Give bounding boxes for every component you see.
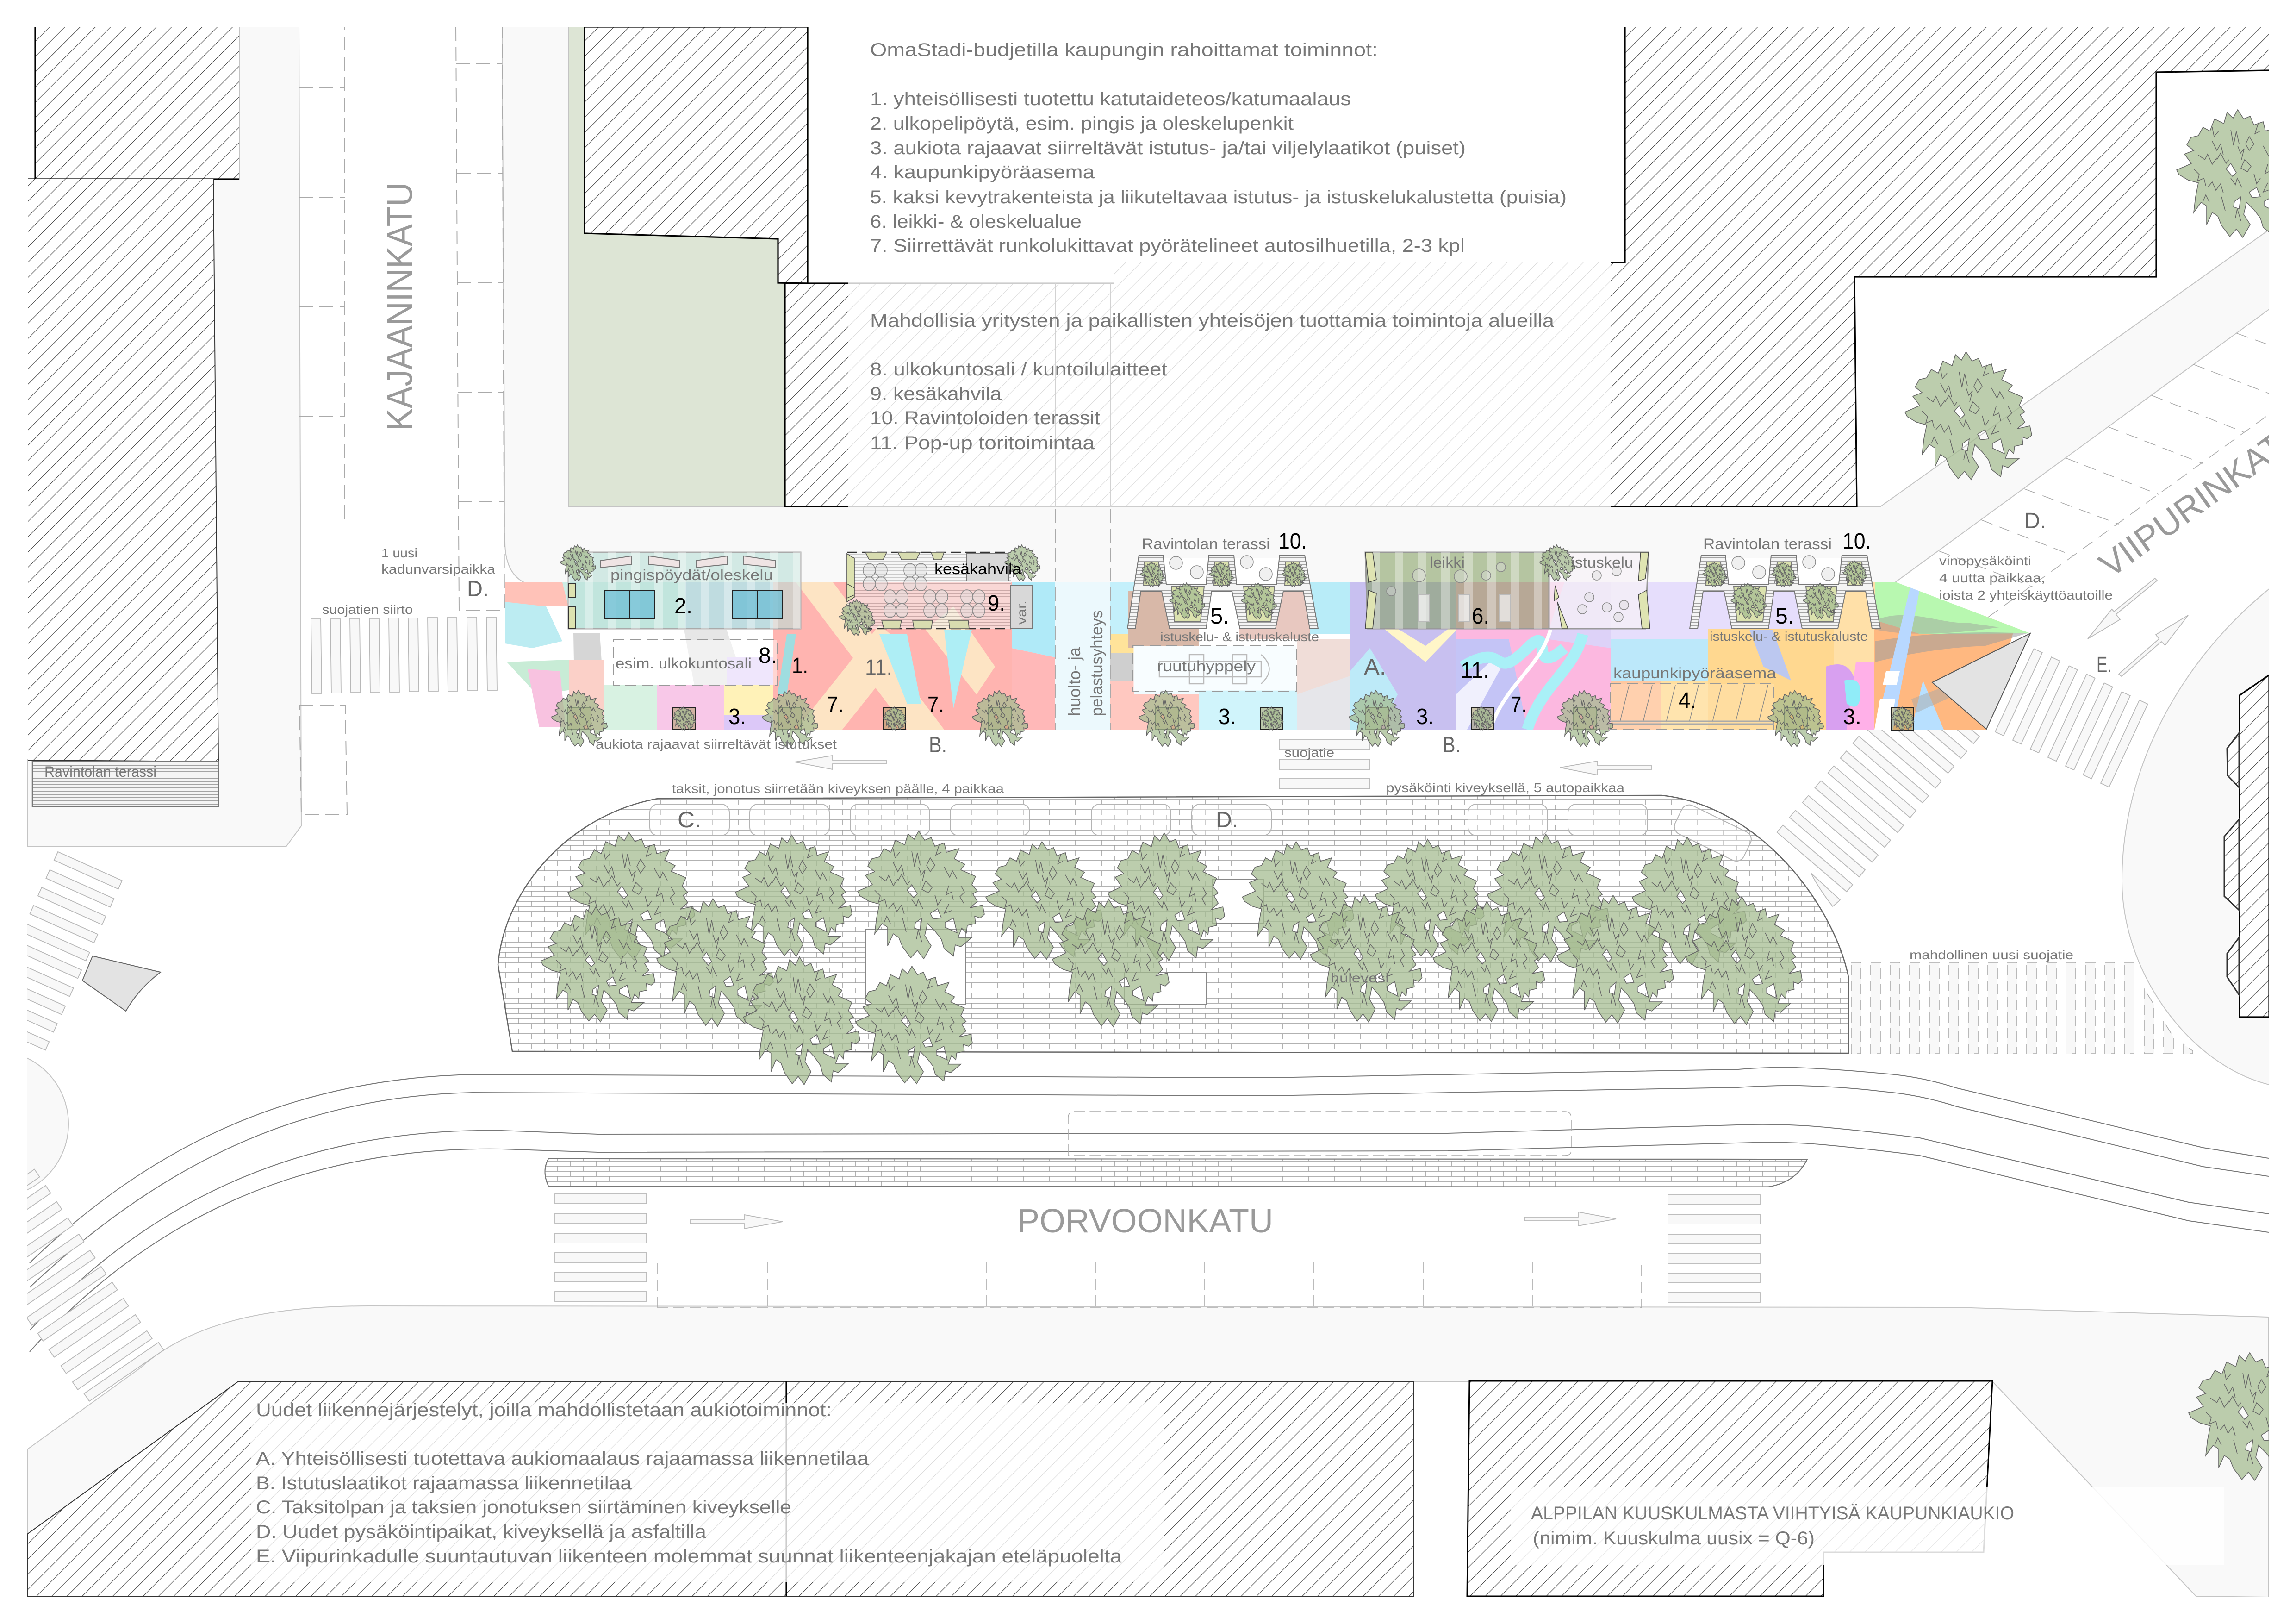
numbers on mural: west part: 3. <box>728 705 746 729</box>
area: terrace furniture 2: Ravintolan terassi <box>1703 536 1832 552</box>
crosswalk: Viipurinkatu <box>1995 649 2148 787</box>
street parking: Kajaaninkatu <box>299 27 504 814</box>
labels south of plaza <box>596 733 1461 757</box>
crosswalks on Porvoonkatu <box>555 1194 1760 1302</box>
text block: OmaStadi budget functions: 6. leikki- & oleskelualue <box>870 212 1082 232</box>
grey traffic island at plaza tip <box>1932 633 2030 729</box>
text block: new traffic arrangements: D. Uudet pysäköintipaikat, kiveyksellä ja asfaltilla <box>256 1522 707 1542</box>
big trees on median <box>541 831 1802 1085</box>
text block: OmaStadi budget functions: 1. yhteisöllisesti tuotettu katutaideteos/katumaalaus <box>870 89 1351 109</box>
street trees <box>1905 110 2296 1480</box>
mural: street painting <box>505 582 2032 731</box>
area: table tennis tables and seating <box>568 552 801 629</box>
street name: Porvoonkatu: PORVOONKATU <box>1017 1203 1273 1240</box>
text block: OmaStadi budget functions: 7. Siirrettävät runkolukittavat pyörätelineet autosilhuetilla, 2-3 kpl <box>870 236 1465 256</box>
numbers on mural: east part: 3. <box>1843 705 1861 729</box>
maintenance lane lines <box>1055 509 1110 730</box>
labels: Viipurinkatu parking: joista 2 yhteiskäyttöautoille <box>1939 588 2113 602</box>
area: terrace furniture 2: 10. <box>1842 529 1871 554</box>
area: terrace furniture 1 <box>1127 529 1319 644</box>
area: seating zone <box>1549 552 1650 629</box>
numbers on mural: west part: 7. <box>927 693 944 717</box>
crosswalk: west upper <box>0 852 122 1050</box>
area: play zone: 6. <box>1472 604 1489 629</box>
area: seating zone: istuskelu <box>1571 554 1633 571</box>
numbers on mural: east part: A. <box>1364 655 1386 680</box>
arrow: Porvoonkatu left <box>690 1215 783 1229</box>
labels: Kajaaninkatu crossing: D. <box>467 577 489 601</box>
arrow: Porvoonkatu right <box>1524 1212 1616 1226</box>
labels: Viipurinkatu parking <box>1939 509 2113 677</box>
crosswalk: plaza south <box>1279 739 1370 789</box>
area: terrace furniture 2: 5. <box>1775 604 1794 629</box>
road edges <box>30 1068 2269 1352</box>
area: terrace furniture 1: 5. <box>1210 604 1229 629</box>
labels south of plaza: aukiota rajaavat siirreltävät istutukset <box>596 737 837 751</box>
crosswalk: plaza south: suojatie <box>1284 745 1334 760</box>
area: play zone <box>1365 552 1549 629</box>
panel: terrace beside building <box>32 762 218 806</box>
labels south of plaza: B. <box>929 733 947 757</box>
label: maintenance and rescue access: pelastusyhteys <box>1087 610 1106 716</box>
area: table tennis tables and seating: pingispöydät/oleskelu <box>610 567 773 583</box>
labels: Viipurinkatu parking: 4 uutta paikkaa, <box>1939 571 2045 585</box>
arrow: Viipurinkatu outbound <box>2119 615 2188 676</box>
text block: possible activities by companies and communities: 8. ulkokuntosali / kuntoilulaitteet <box>870 359 1167 380</box>
possible new crosswalk: mahdollinen uusi suojatie <box>1910 948 2073 962</box>
green courtyard <box>568 27 809 507</box>
area: play zone: leikki <box>1430 554 1465 571</box>
area: city bike station: 4. <box>1679 688 1696 713</box>
panel: terrace beside building: Ravintolan terassi <box>44 763 156 780</box>
area: terrace furniture 2: istuskelu- & istutuskaluste <box>1710 629 1868 643</box>
parking spots on Porvoonkatu <box>658 1262 1642 1308</box>
area: outdoor gym <box>613 640 777 685</box>
taxi and parking spots on median <box>650 802 1754 864</box>
text block: possible activities by companies and communities <box>870 311 1555 453</box>
median labels: pysäköinti kiveyksellä, 5 autopaikkaa <box>1386 781 1624 795</box>
labels: Viipurinkatu parking: vinopysäköinti <box>1939 554 2031 568</box>
panel: title background <box>1511 1487 2224 1565</box>
area: table tennis tables and seating: 2. <box>674 594 692 618</box>
title: (nimim. Kuuskulma uusix = Q-6) <box>1533 1528 1815 1549</box>
title: ALPPILAN KUUSKULMASTA VIIHTYISÄ KAUPUNKIAUKIO <box>1531 1503 2014 1524</box>
label: summer cafe name: kesäkahvila <box>934 561 1021 577</box>
traffic island west <box>82 956 161 1011</box>
title <box>1531 1503 2014 1549</box>
planter boxes and small trees on plaza <box>552 545 1914 747</box>
crosswalk: toward median east <box>1777 677 1979 906</box>
area: city bike station <box>1610 665 1776 730</box>
labels: Kajaaninkatu crossing <box>322 546 495 617</box>
numbers on mural: east part: 7. <box>1511 693 1527 717</box>
text block: new traffic arrangements: Uudet liikennejärjestelyt, joilla mahdollistetaan aukiotoiminnot: <box>256 1400 832 1420</box>
label: maintenance and rescue access: huolto- ja <box>1065 647 1084 716</box>
crosswalk: Kajaaninkatu <box>311 617 497 693</box>
numbers on mural: west part: 11. <box>865 656 892 680</box>
text block: OmaStadi budget functions: OmaStadi-budjetilla kaupungin rahoittamat toiminnot: <box>870 40 1378 60</box>
area: city bike station: kaupunkipyöräasema <box>1613 665 1776 681</box>
street name: Kajaaninkatu: KAJAANINKATU <box>379 182 420 431</box>
median labels: C. <box>678 808 701 832</box>
numbers on mural: west part <box>728 654 944 729</box>
label: stormwater: hulevesi <box>1331 971 1389 985</box>
area: hopscotch <box>1133 646 1297 691</box>
numbers on mural: east part: 11. <box>1461 658 1489 683</box>
panel: text veil on upper building <box>848 262 1611 507</box>
text block: new traffic arrangements <box>256 1400 1122 1567</box>
arrow: plaza traffic east part <box>1560 761 1652 775</box>
area: terrace furniture 1: istuskelu- & istutuskaluste <box>1160 630 1319 644</box>
area: summer cafe: var. <box>1014 600 1029 625</box>
arrow: plaza traffic west <box>795 756 886 769</box>
median labels: taksit, jonotus siirretään kiveyksen päälle, 4 paikkaa <box>672 781 1004 796</box>
area: terrace furniture 1: Ravintolan terassi <box>1142 536 1270 552</box>
label: maintenance and rescue access <box>1065 610 1106 716</box>
area: summer cafe: 9. <box>988 591 1005 616</box>
area: terrace furniture 2 <box>1690 529 1880 643</box>
text block: possible activities by companies and communities: Mahdollisia yritysten ja paikallisten yhteisöjen tuottamia toimintoja alueilla <box>870 311 1555 331</box>
island on Porvoonkatu <box>545 1112 1807 1187</box>
text block: new traffic arrangements: A. Yhteisöllisesti tuotettava aukiomaalaus rajaamassa liikennetilaa <box>256 1449 869 1469</box>
crosswalk: west lower <box>0 1169 164 1401</box>
text block: possible activities by companies and communities: 10. Ravintoloiden terassit <box>870 408 1100 428</box>
area: outdoor gym: esim. ulkokuntosali <box>616 655 752 672</box>
labels: Kajaaninkatu crossing: kadunvarsipaikka <box>381 562 495 576</box>
text block: new traffic arrangements: E. Viipurinkadulle suuntautuvan liikenteen molemmat suunnat liikenteenjakajan eteläpuolelta <box>256 1546 1122 1567</box>
numbers on mural: east part: 3. <box>1218 705 1236 729</box>
labels: Viipurinkatu parking: D. <box>2024 509 2046 533</box>
area: outdoor gym: 8. <box>759 643 777 668</box>
numbers on mural: east part <box>1218 655 1861 729</box>
text block: OmaStadi budget functions: 4. kaupunkipyöräasema <box>870 162 1095 182</box>
labels: Viipurinkatu parking: E. <box>2097 653 2112 677</box>
numbers on mural: east part: 3. <box>1416 705 1434 729</box>
text block: new traffic arrangements: C. Taksitolpan ja taksien jonotuksen siirtäminen kiveykselle <box>256 1497 791 1518</box>
median labels: D. <box>1216 808 1238 832</box>
text block: OmaStadi budget functions <box>870 40 1567 256</box>
text block: possible activities by companies and communities: 11. Pop-up toritoimintaa <box>870 433 1095 453</box>
text block: new traffic arrangements: B. Istutuslaatikot rajaamassa liikennetilaa <box>256 1473 632 1493</box>
labels: Kajaaninkatu crossing: 1 uusi <box>381 546 417 560</box>
text block: possible activities by companies and communities: 9. kesäkahvila <box>870 384 1002 404</box>
numbers on mural: west part: 1. <box>792 654 808 678</box>
area: summer cafe <box>847 552 1033 629</box>
numbers on mural: west part: 7. <box>827 693 844 717</box>
area: terrace furniture 1: 10. <box>1278 529 1307 554</box>
panel: text veil on south building <box>251 1403 1164 1582</box>
labels south of plaza: B. <box>1443 733 1461 757</box>
text block: OmaStadi budget functions: 2. ulkopelipöytä, esim. pingis ja oleskelupenkit <box>870 113 1294 134</box>
labels: Kajaaninkatu crossing: suojatien siirto <box>322 602 413 617</box>
median labels <box>672 781 1624 832</box>
arrow: Viipurinkatu inbound <box>2088 578 2157 639</box>
text block: OmaStadi budget functions: 5. kaksi kevytrakenteista ja liikuteltavaa istutus- ja istuskelukalustetta (puisia) <box>870 187 1567 207</box>
diagonal parking: Viipurinkatu <box>1939 333 2269 617</box>
text block: OmaStadi budget functions: 3. aukiota rajaavat siirreltävät istutus- ja/tai viljelylaatikot (puiset) <box>870 138 1466 158</box>
area: hopscotch: ruutuhyppely <box>1157 658 1256 675</box>
possible new crosswalk <box>1851 948 2193 1054</box>
paved median <box>498 795 1848 1053</box>
